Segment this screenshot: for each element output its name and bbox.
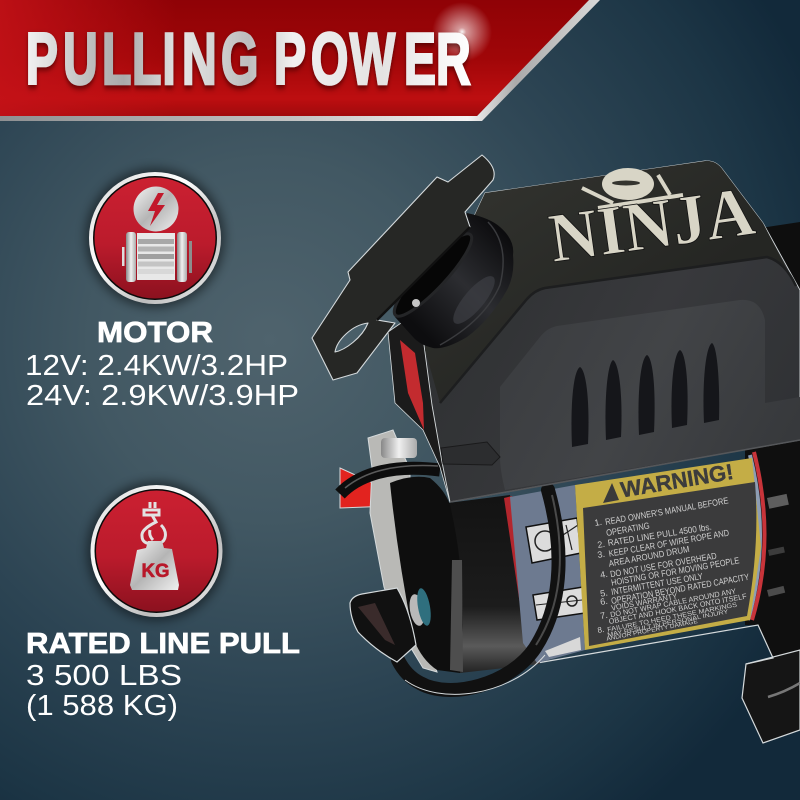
blue edge — [748, 455, 760, 620]
boot highlight — [358, 603, 395, 645]
motor highlights — [767, 494, 789, 597]
warning triangle — [603, 483, 619, 503]
warning body text: 6. — [599, 596, 608, 607]
blue label strip — [510, 485, 585, 663]
ninja mask — [612, 180, 640, 186]
warning body text: 4. — [599, 569, 608, 580]
right label edge — [752, 452, 765, 620]
icon: motor — [85, 168, 225, 308]
warning body text: FAILURE TO HEED THESE MARKINGS — [607, 601, 738, 634]
red stripe — [504, 496, 540, 663]
warning body text: 7. — [599, 610, 608, 621]
warning body text — [594, 495, 750, 643]
boot rib — [440, 222, 503, 345]
warning label — [575, 458, 761, 650]
pictogram 1 — [526, 518, 581, 563]
mounting foot — [742, 650, 800, 743]
kg label: KG — [142, 561, 170, 582]
cooling slots — [571, 343, 719, 447]
motor heading: MOTOR — [97, 317, 213, 349]
cable halo — [405, 655, 545, 694]
side panel — [388, 310, 450, 502]
warning body text: READ OWNER'S MANUAL BEFORE — [604, 495, 729, 527]
line pull lbs: 3 500 LBS — [26, 660, 182, 692]
warning heading: WARNING! — [619, 459, 735, 502]
line pull kg: (1 588 KG) — [26, 690, 178, 722]
warning body text: DO NOT USE FOR OVERHEAD — [609, 551, 718, 579]
warning body text: 5. — [599, 588, 608, 599]
motor 24V spec: 24V: 2.9KW/3.9HP — [26, 380, 299, 412]
warning body text: OPERATING — [605, 520, 650, 538]
warning body text: VOIDS WARRANTY — [610, 591, 679, 613]
title: PULLING POWER — [26, 19, 471, 101]
warning body text: INTERMITTENT USE ONLY — [610, 571, 704, 597]
warning body text: AND/OR PROPERTY DAMAGE — [606, 619, 698, 643]
warning body text: 2. — [597, 539, 606, 550]
warning body text: 1. — [594, 517, 603, 528]
pictogram 3 — [545, 637, 581, 657]
warning body text: MAY RESULT IN PERSONAL INJURY — [607, 609, 729, 639]
warning body text: RATED LINE PULL 4500 lbs. — [607, 522, 712, 548]
pictogram 2 — [533, 587, 585, 620]
warning body text: DO NOT WRAP CABLE AROUND ANY — [609, 586, 737, 619]
warning body text: 8. — [597, 625, 605, 635]
warning body text: OPERATION BEYOND RATED CAPACITY — [610, 572, 750, 606]
icon: hook and kg weight — [86, 481, 226, 621]
motor drum — [448, 495, 540, 673]
line pull text — [26, 628, 300, 722]
ninja wordmark: NINJA — [545, 173, 760, 278]
winch product — [312, 155, 800, 743]
warning body text: AREA AROUND DRUM — [608, 544, 690, 569]
motor text — [25, 317, 299, 412]
cover lower — [424, 161, 800, 502]
motor 12V spec: 12V: 2.4KW/3.2HP — [25, 350, 288, 382]
halo at foot notch — [537, 625, 773, 664]
boot bolt — [412, 299, 420, 307]
crossed swords — [582, 175, 683, 208]
upper cable — [340, 468, 440, 494]
line pull heading: RATED LINE PULL — [26, 628, 300, 660]
boot opening — [386, 226, 480, 324]
upper cable shine — [345, 466, 438, 488]
header banner — [0, 0, 600, 121]
warning body text: 3. — [597, 549, 606, 560]
warning body text: HOISTING OR FOR MOVING PEOPLE — [610, 555, 740, 588]
cover lip — [450, 440, 800, 502]
cover corner — [441, 442, 500, 465]
warning body text: OBJECT AND HOOK BACK ONTO ITSELF — [608, 592, 748, 626]
red sticker — [400, 340, 424, 430]
end cap — [390, 477, 463, 673]
motor right end — [745, 435, 800, 660]
dust flap — [312, 155, 494, 380]
rear cable — [398, 490, 559, 690]
terminal nut — [415, 587, 433, 627]
foot highlight — [768, 683, 800, 697]
warning body text: KEEP CLEAR OF WIRE ROPE AND — [608, 528, 730, 559]
terminal bolt — [407, 593, 427, 627]
silver bracket — [368, 430, 437, 672]
cover edge — [440, 257, 796, 403]
cover upper — [425, 161, 795, 403]
end cap highlight — [450, 560, 463, 672]
rear cable shine — [536, 495, 560, 645]
red lever — [340, 468, 392, 508]
boot shine — [447, 271, 501, 329]
rubber terminal boot — [350, 588, 416, 662]
bracket nut — [381, 438, 417, 458]
cover inner panel — [500, 300, 800, 490]
top rods — [760, 222, 800, 292]
ninja head — [602, 168, 654, 200]
ninja logo — [545, 168, 760, 278]
rubber boot — [386, 213, 513, 348]
flap rim — [377, 227, 470, 320]
